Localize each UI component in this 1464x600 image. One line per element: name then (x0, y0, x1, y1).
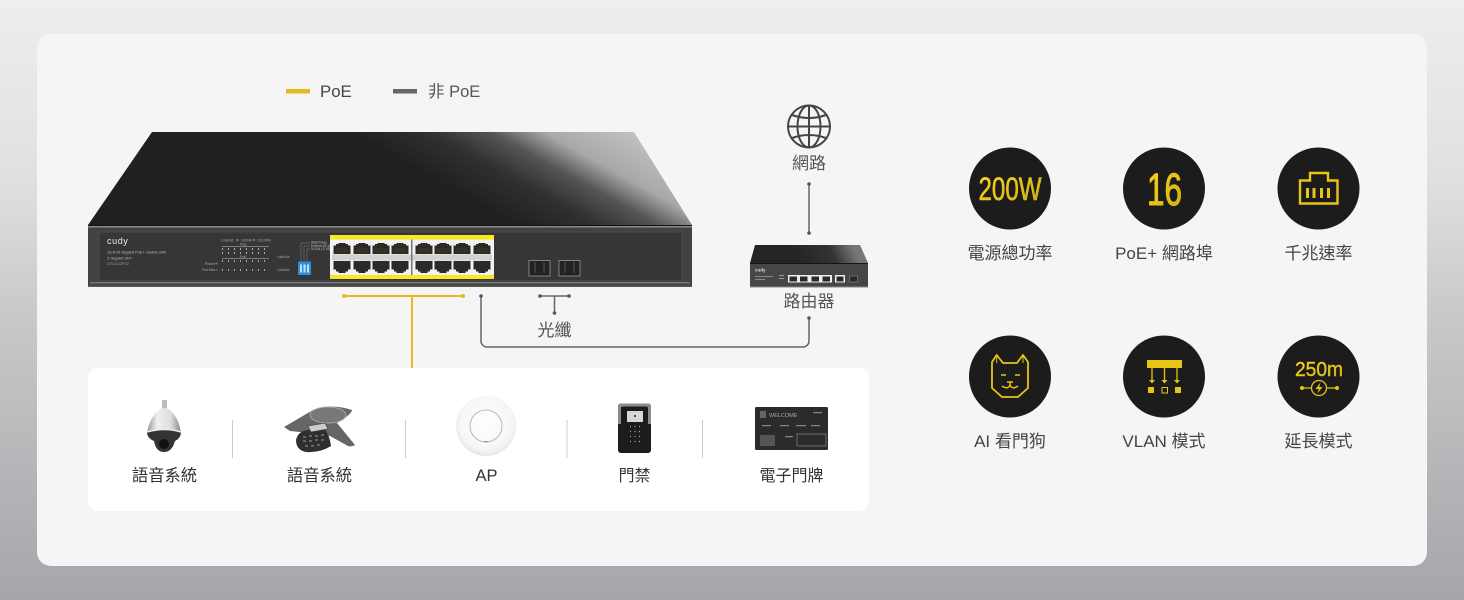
DIP switches: Watchdog (311, 240, 327, 244)
divider (232, 420, 233, 458)
LED indicators: Power (205, 262, 216, 266)
RJ45 port block (330, 235, 494, 279)
router (750, 245, 868, 288)
divider (702, 420, 703, 458)
LED indicators: Link/Act (221, 238, 233, 242)
label: fiber: 光纖 (538, 321, 572, 340)
LED indicators: Link/Act (277, 268, 289, 272)
DIP switches: Extend (6-16) (311, 244, 332, 248)
DIP switches: VLAN (1-16) (311, 247, 330, 251)
label: internet: 網路 (792, 154, 826, 173)
switch front panel: cudy (107, 236, 128, 246)
LED indicators: 1000M (241, 238, 252, 242)
connector: internet to router (807, 182, 811, 235)
feature: AI watchdog (969, 336, 1051, 451)
legend: PoE (320, 82, 352, 101)
connector: switch to router (479, 294, 811, 347)
feature: extend mode (1278, 336, 1360, 451)
switch front panel: 2 Gigabit SFP (107, 256, 132, 260)
feature: gigabit (1278, 148, 1360, 263)
legend (286, 82, 480, 101)
legend: 非 PoE (428, 82, 480, 101)
label: digital door sign: 電子門牌 (759, 467, 824, 485)
connector: PoE (yellow) (342, 294, 465, 368)
icon: conference phone (284, 406, 355, 452)
switch front panel (88, 225, 692, 287)
DIP switches (298, 240, 332, 275)
connector: fiber (538, 294, 571, 315)
icon: globe (788, 106, 830, 148)
LED indicators: PoE (240, 255, 247, 259)
icon: digital door sign (755, 407, 828, 450)
label: voice system 1: 語音系統 (132, 467, 197, 485)
feature: VLAN mode (1122, 336, 1206, 451)
LED indicators: Full Max (202, 268, 215, 272)
feature: 16 ports (1115, 148, 1213, 263)
LED indicators: 10/100M (257, 238, 271, 242)
label: AP: AP (475, 467, 498, 485)
LED indicators: Link/Act (277, 255, 289, 259)
feature: extend mode: 250m (1295, 359, 1343, 381)
icon: access control keypad (618, 404, 651, 453)
switch front panel: 16-Port Gigabit PoE+ Switch with (107, 250, 166, 254)
label: voice system 2: 語音系統 (287, 467, 352, 485)
router: cudy (755, 268, 766, 272)
feature: 200W: 電源總功率 (968, 244, 1052, 263)
label: router: 路由器 (784, 292, 834, 311)
feature: AI watchdog: AI 看門狗 (974, 432, 1046, 451)
feature: VLAN mode: VLAN 模式 (1122, 432, 1206, 451)
label: access control: 門禁 (618, 467, 651, 485)
divider (566, 420, 568, 458)
divider (405, 420, 406, 458)
LED indicators: PoE (240, 242, 247, 246)
switch front panel: GS1020PS2 (107, 261, 130, 266)
feature: extend mode: 延長模式 (1284, 432, 1352, 451)
icon: PTZ camera (147, 400, 181, 452)
SFP ports (529, 260, 580, 276)
feature: 200W: 200W (978, 171, 1042, 207)
icon: digital door sign: WELCOME (769, 413, 798, 419)
switch top panel (88, 132, 692, 225)
feature: 200W (968, 148, 1052, 263)
icon: access point (456, 396, 516, 456)
feature: gigabit: 千兆速率 (1284, 244, 1352, 263)
feature: 16 ports: 16 (1147, 164, 1182, 215)
16-port PoE switch (88, 132, 692, 287)
panel: PoE devices (88, 368, 869, 511)
LED indicators (202, 238, 289, 272)
feature: 16 ports: PoE+ 網路埠 (1115, 244, 1213, 263)
